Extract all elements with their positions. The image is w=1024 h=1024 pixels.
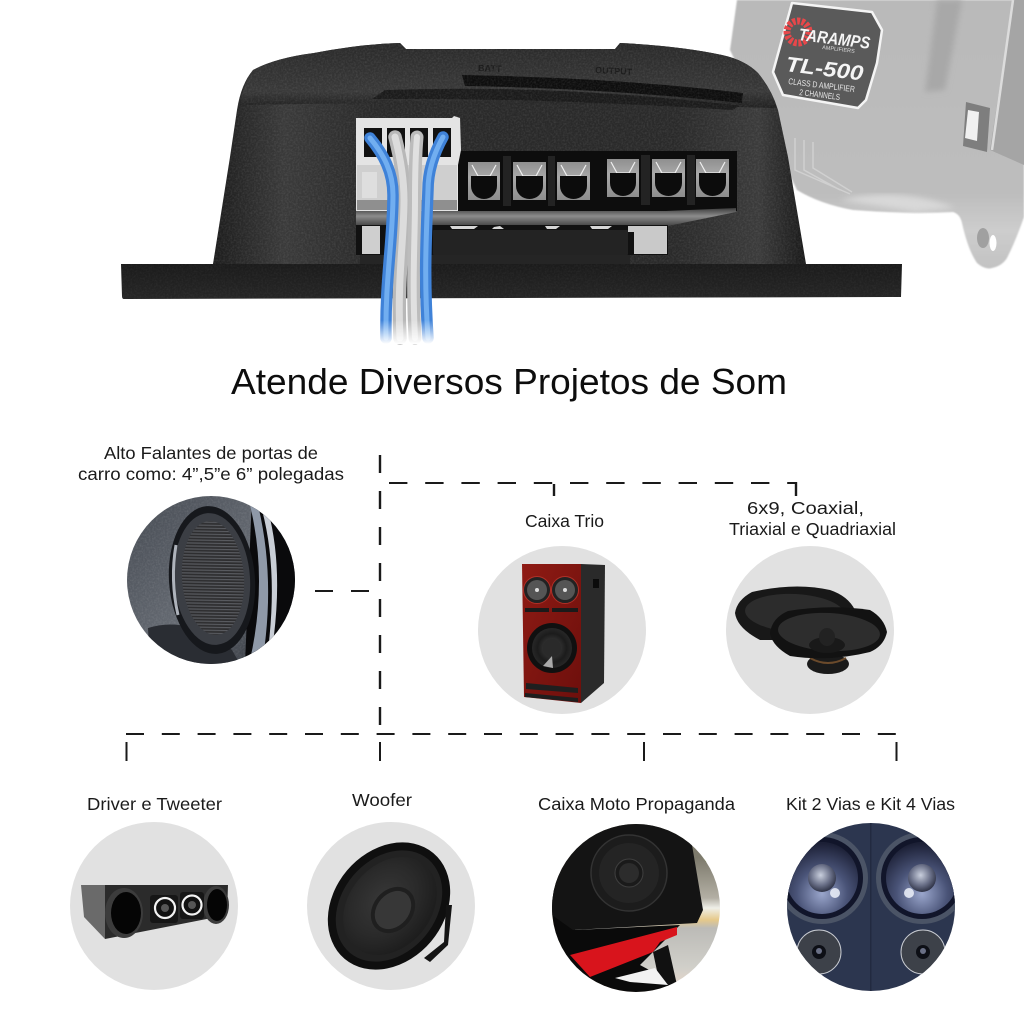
circle: driver and tweeter box xyxy=(70,822,238,990)
upper left driver xyxy=(524,576,550,604)
tweeter left xyxy=(150,895,178,923)
main woofer xyxy=(527,623,577,673)
label: door speakers: Alto Falantes de portas de xyxy=(104,443,318,463)
housing body xyxy=(213,43,806,264)
embossed label OUTPUT: OUTPUT xyxy=(595,65,633,77)
main module: black housing xyxy=(121,43,902,299)
metal bar xyxy=(356,208,736,226)
cabinet front xyxy=(522,564,581,703)
label: door speakers xyxy=(78,443,344,484)
terminal recess xyxy=(458,151,737,211)
model name: TL-500 xyxy=(784,53,865,86)
label: 6x9, coaxial xyxy=(729,498,896,539)
front speaker xyxy=(770,607,887,658)
terminal 5 xyxy=(652,159,685,197)
box side xyxy=(81,885,106,939)
lower opening xyxy=(356,225,668,255)
housing top face xyxy=(240,43,777,108)
label: Kit 2 Vias e Kit 4 Vias: Kit 2 Vias e Kit 4 Vias xyxy=(786,794,955,814)
tweeter right xyxy=(180,892,204,919)
circle: woofer xyxy=(303,818,475,994)
terminal 3 xyxy=(557,162,590,200)
background amplifier, faded xyxy=(730,0,1024,268)
photo: motorcycle speaker box xyxy=(552,824,720,992)
white accent xyxy=(615,968,668,985)
rear speaker xyxy=(735,586,855,640)
label: 6x9, coaxial: Triaxial e Quadriaxial xyxy=(729,519,896,539)
label: Driver e Tweeter: Driver e Tweeter xyxy=(87,794,222,814)
left tweeter xyxy=(797,930,841,974)
logo sunburst xyxy=(787,21,809,43)
photo: kit speakers xyxy=(787,823,955,991)
speaker box xyxy=(552,824,703,930)
label: Woofer: Woofer xyxy=(352,790,412,810)
red fairing xyxy=(570,927,677,977)
upper right driver xyxy=(552,576,578,604)
label: 6x9, coaxial: 6x9, Coaxial, xyxy=(747,498,864,518)
class text: CLASS D AMPLIFIER xyxy=(788,76,855,94)
housing grain xyxy=(213,43,806,264)
terminal 2 xyxy=(513,162,546,200)
amplifier label plate xyxy=(773,3,882,108)
right midrange xyxy=(876,833,955,924)
label: Caixa Trio: Caixa Trio xyxy=(525,511,604,531)
embossed circuit marks xyxy=(372,89,740,110)
photo: car door speaker xyxy=(127,496,295,664)
label: door speakers: carro como: 4”,5”e 6” polegadas xyxy=(78,464,344,484)
right tweeter xyxy=(901,930,945,974)
terminal 4 xyxy=(607,159,639,197)
terminal 6 xyxy=(696,159,729,197)
clips above bar xyxy=(450,226,612,229)
cables: two blue, two grey xyxy=(370,137,443,344)
lower left white part xyxy=(362,226,380,254)
terminal 1 xyxy=(468,162,500,200)
lower right white part xyxy=(628,226,667,254)
logo name: TARAMPS xyxy=(798,25,872,53)
dashed connector lines xyxy=(126,455,896,761)
circle: Caixa Trio xyxy=(478,546,646,714)
rear strut xyxy=(653,945,677,985)
left midrange xyxy=(787,833,868,924)
lower black bar xyxy=(433,230,628,255)
logo tagline: AMPLIFIERS xyxy=(822,45,855,55)
box front xyxy=(105,885,228,939)
wire recess on base xyxy=(360,255,630,264)
left horn xyxy=(105,888,143,938)
circle: 6x9 speakers xyxy=(726,546,894,714)
lower black body xyxy=(552,877,680,992)
channels text: 2 CHANNELS xyxy=(799,87,841,102)
right horn xyxy=(203,886,229,924)
title: Atende Diversos Projetos de Som xyxy=(231,361,787,402)
base plate xyxy=(121,264,902,299)
embossed label BATT: BATT xyxy=(478,63,502,74)
speaker cone xyxy=(591,835,667,911)
white connector xyxy=(356,116,461,211)
PCB connector xyxy=(963,102,990,152)
magnet xyxy=(807,654,849,674)
ports xyxy=(525,608,578,612)
label: Caixa Moto Propaganda: Caixa Moto Propaganda xyxy=(538,794,735,814)
connector slot xyxy=(462,75,743,103)
mounting hole xyxy=(977,228,996,251)
bottom port xyxy=(526,683,578,693)
base plate grain xyxy=(121,264,902,299)
cabinet side xyxy=(581,564,605,703)
